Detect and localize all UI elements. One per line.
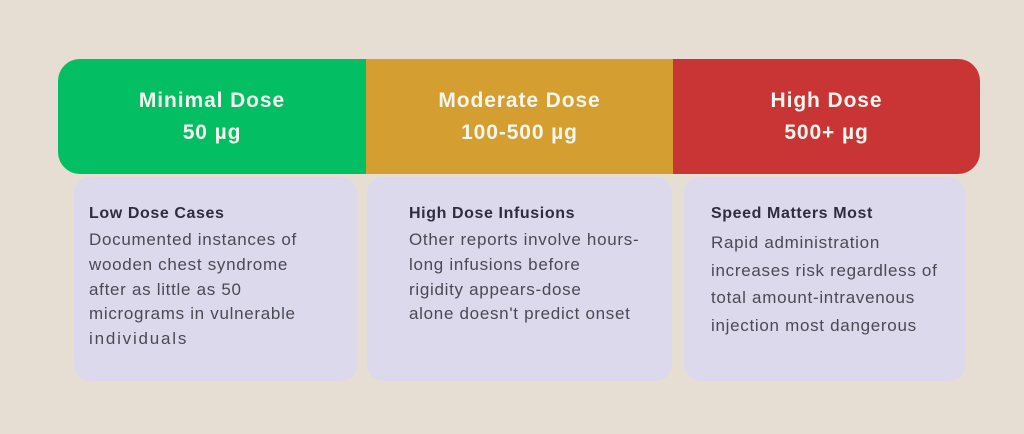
card 2 body: rigidity appears-dose bbox=[409, 280, 582, 299]
card 3 title: Speed Matters Most bbox=[711, 205, 873, 222]
card 1 body: after as little as 50 bbox=[89, 280, 242, 299]
card 2 body bbox=[409, 230, 639, 323]
card 2 body: long infusions before bbox=[409, 255, 581, 274]
card 1 title: Low Dose Cases bbox=[89, 205, 225, 222]
header: high dose: 500+ µg bbox=[784, 121, 869, 144]
card 3 body: increases risk regardless of bbox=[711, 260, 938, 280]
card 1 body: wooden chest syndrome bbox=[89, 255, 288, 274]
card 3 body: total amount-intravenous bbox=[711, 288, 915, 307]
card: speed matters most bbox=[684, 177, 965, 381]
header: minimal dose: Minimal Dose bbox=[139, 89, 285, 112]
header: minimal dose bbox=[58, 59, 366, 174]
card: high dose infusions bbox=[367, 177, 672, 381]
card 2 body: alone doesn't predict onset bbox=[409, 304, 631, 323]
card 3 body: Rapid administration bbox=[711, 233, 880, 252]
card 3 body: injection most dangerous bbox=[711, 316, 917, 334]
card 1 body: Documented instances of bbox=[89, 230, 297, 249]
header: moderate dose bbox=[366, 59, 673, 174]
card 3 body bbox=[711, 233, 938, 334]
card 1 body: individuals bbox=[89, 329, 188, 348]
card 1 body: micrograms in vulnerable bbox=[89, 304, 296, 323]
header: high dose: High Dose bbox=[771, 89, 882, 112]
card: low dose cases bbox=[74, 177, 357, 381]
card 2 title: High Dose Infusions bbox=[409, 205, 575, 222]
card 2 body: Other reports involve hours- bbox=[409, 230, 639, 249]
card 1 body bbox=[89, 230, 297, 348]
header: moderate dose: 100-500 µg bbox=[461, 121, 578, 144]
header: minimal dose: 50 µg bbox=[183, 121, 241, 144]
header: high dose bbox=[673, 59, 980, 174]
header: moderate dose: Moderate Dose bbox=[438, 89, 601, 112]
